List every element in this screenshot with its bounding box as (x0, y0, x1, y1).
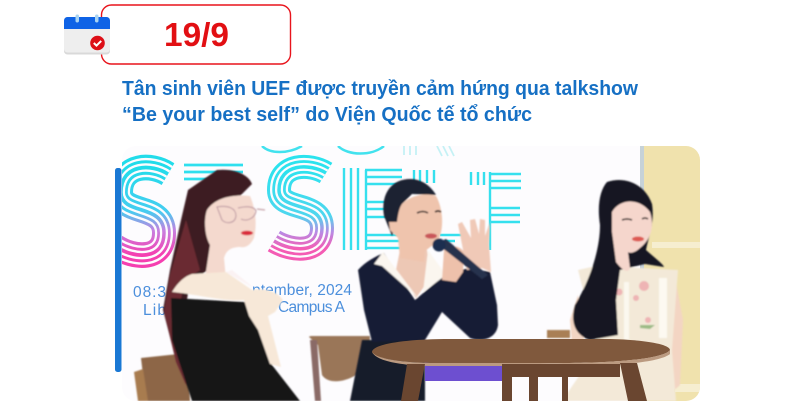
hair (383, 179, 436, 236)
person left (163, 170, 300, 401)
photo: talkshow panel (116, 146, 700, 401)
backdrop screen (122, 146, 642, 401)
lips (241, 231, 253, 235)
face (205, 196, 256, 280)
eyes (622, 218, 648, 220)
title (122, 78, 638, 126)
icon: calendar (64, 14, 110, 54)
wall (640, 146, 700, 401)
letter F (471, 172, 521, 250)
event info text: 08:3 (133, 284, 166, 301)
black top (171, 298, 300, 401)
infographic canvas (64, 4, 700, 401)
person center (350, 179, 498, 401)
title: “Be your best self” do Viện Quốc tế tổ chức (122, 104, 532, 126)
hair (573, 180, 664, 340)
hair (163, 170, 252, 388)
table (372, 339, 670, 401)
letter S middle (274, 167, 326, 249)
letter S left (116, 168, 168, 255)
skirt (350, 340, 425, 401)
event info text (134, 284, 352, 316)
mouth (425, 233, 437, 239)
jacket (358, 253, 498, 342)
top fragments (262, 146, 384, 154)
letter E (344, 168, 402, 250)
eyes (417, 211, 441, 213)
raised hand (458, 219, 491, 272)
face and neck (389, 195, 442, 262)
cream shawl (172, 272, 283, 367)
arms (570, 289, 683, 389)
glasses (217, 206, 265, 223)
left hand (442, 246, 464, 282)
event info text: Lib (143, 302, 166, 319)
title: Tân sinh viên UEF được truyền cảm hứng qua talkshow (122, 78, 638, 100)
floral embroidery (616, 281, 655, 329)
blue accent bar (115, 168, 122, 372)
face and neck (612, 202, 652, 271)
chest (396, 250, 430, 298)
letter L fragment (414, 170, 462, 241)
letter T (184, 165, 243, 179)
backdrop lettering (116, 146, 521, 255)
white lapels (374, 250, 446, 298)
date text: 19/9 (164, 17, 229, 54)
event info text: Campus A (278, 299, 346, 316)
chairs (134, 330, 570, 401)
date box (102, 5, 290, 64)
event info text: ptember, 2024 (252, 282, 352, 299)
lips (632, 236, 644, 242)
dress (562, 265, 678, 401)
microphone (442, 238, 488, 279)
person right (562, 180, 683, 401)
